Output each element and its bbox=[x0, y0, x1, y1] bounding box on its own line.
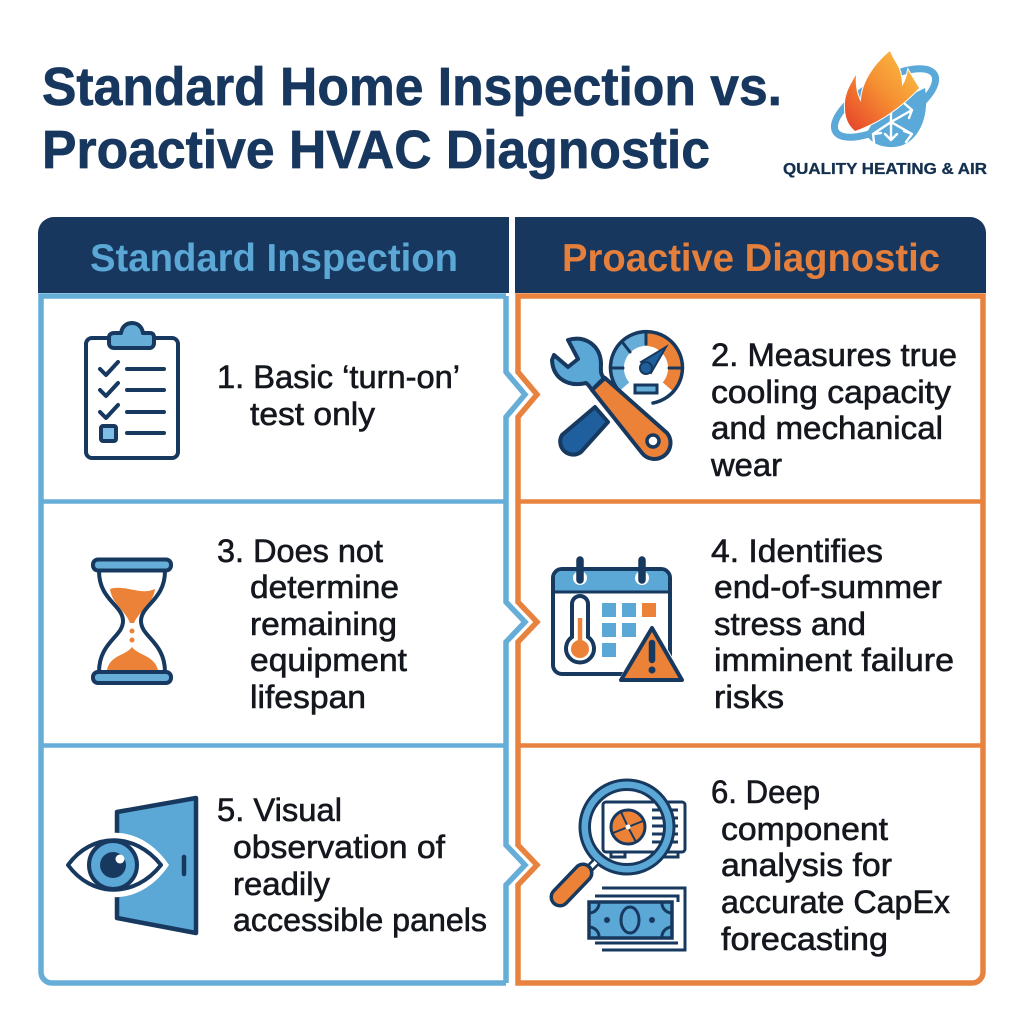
text: item 6 bbox=[711, 774, 950, 957]
panel frame and row dividers bbox=[41, 296, 506, 983]
icon: eye and door bbox=[60, 798, 196, 933]
text: item 3: lifespan bbox=[250, 679, 366, 715]
column header: standard inspection bbox=[38, 217, 509, 293]
icon: calendar with thermometer and warning bbox=[553, 560, 689, 686]
text: item 4: end-of-summer bbox=[714, 569, 942, 605]
text: item 6: 6. Deep bbox=[711, 774, 820, 810]
text: item 3: 3. Does not bbox=[217, 533, 383, 569]
text: item 6: forecasting bbox=[721, 921, 888, 957]
text: item 2: and mechanical bbox=[711, 410, 943, 446]
column header: proactive diagnostic: Proactive Diagnostic bbox=[562, 237, 940, 280]
text: item 3 bbox=[217, 533, 407, 715]
text: item 3: remaining bbox=[250, 606, 397, 642]
icon: magnifier, AC unit and money bbox=[560, 780, 685, 950]
text: item 6: analysis for bbox=[721, 847, 892, 883]
text: item 2: wear bbox=[710, 447, 782, 483]
text: item 1: test only bbox=[250, 396, 375, 432]
logo: Quality Heating & Air: QUALITY HEATING & AIR bbox=[783, 161, 987, 178]
text: item 4 bbox=[711, 533, 954, 715]
text: item 5: readily bbox=[233, 866, 330, 902]
text: item 5: 5. Visual bbox=[217, 792, 342, 828]
text: item 2 bbox=[710, 337, 957, 483]
title bbox=[42, 57, 782, 180]
blue divider with chevrons bbox=[506, 296, 525, 983]
panel frame, dividers and chevrons bbox=[518, 296, 983, 983]
panel: standard inspection bbox=[38, 217, 509, 983]
icon: hourglass bbox=[93, 560, 171, 683]
text: item 6: accurate CapEx bbox=[721, 884, 950, 920]
text: item 2: cooling capacity bbox=[711, 374, 951, 410]
text: item 5 bbox=[217, 792, 487, 938]
text: item 4: 4. Identifies bbox=[711, 533, 883, 569]
text: item 5: accessible panels bbox=[233, 902, 487, 938]
text: item 6: component bbox=[721, 811, 888, 847]
text: item 2: 2. Measures true bbox=[711, 337, 957, 373]
logo: Quality Heating & Air bbox=[783, 51, 987, 178]
text: item 1 bbox=[217, 359, 460, 432]
text: item 4: imminent failure bbox=[714, 642, 954, 678]
panel: proactive diagnostic bbox=[515, 217, 986, 983]
title: Proactive HVAC Diagnostic bbox=[42, 120, 710, 180]
text: item 5: observation of bbox=[233, 829, 445, 865]
column header: standard inspection: Standard Inspection bbox=[90, 237, 458, 280]
icon: clipboard checklist bbox=[86, 323, 178, 458]
text: item 3: equipment bbox=[250, 642, 407, 678]
text: item 4: stress and bbox=[714, 606, 866, 642]
icon: wrench and gauge bbox=[552, 332, 682, 459]
text: item 4: risks bbox=[714, 679, 784, 715]
text: item 3: determine bbox=[250, 569, 399, 605]
column header: proactive diagnostic bbox=[515, 217, 986, 293]
title: Standard Home Inspection vs. bbox=[42, 57, 782, 117]
text: item 1: 1. Basic ‘turn-on’ bbox=[217, 359, 460, 395]
